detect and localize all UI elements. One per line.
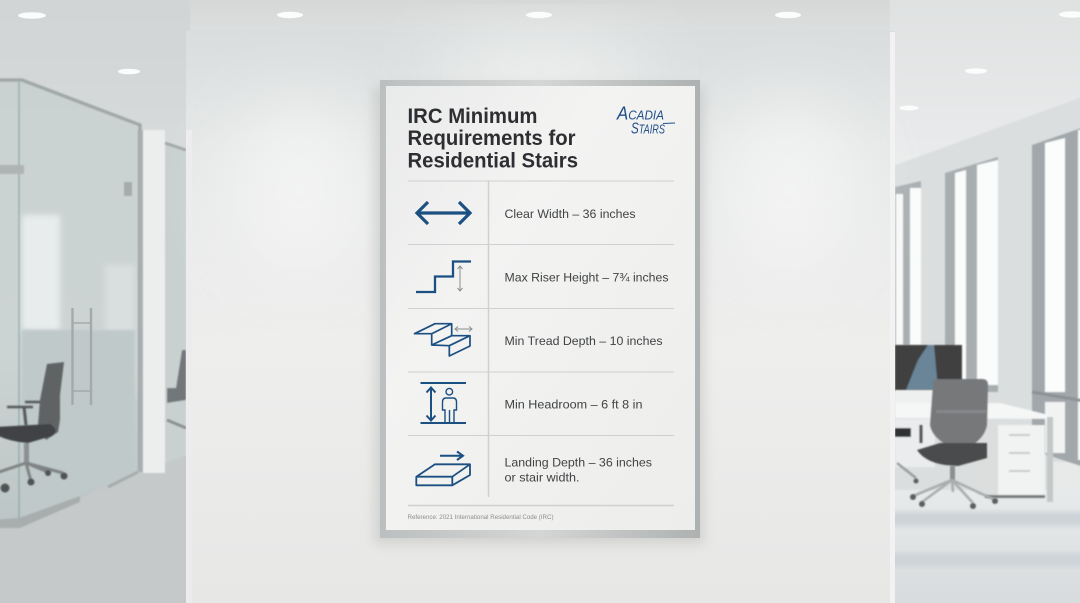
text: clear width: Clear Width – 36 inches [504, 207, 636, 221]
logo: Acadia Stairs: ACADIA [616, 104, 664, 124]
background: monitor [895, 345, 962, 391]
logo: Acadia Stairs: STAIRS [631, 120, 665, 137]
background: right office ceiling and wall [890, 0, 1080, 495]
text: landing depth: or stair width. [504, 470, 580, 484]
heading: IRC Minimum [408, 104, 538, 128]
icon: landing depth [416, 452, 470, 485]
background: left office with glass room [0, 0, 190, 603]
poster shadow [374, 86, 704, 544]
heading [408, 104, 578, 172]
poster panel [386, 86, 695, 530]
logo: Acadia Stairs [616, 104, 675, 137]
ceiling band [0, 0, 1080, 34]
icon: riser height [416, 262, 471, 292]
text: tread depth: Min Tread Depth – 10 inches [504, 334, 662, 348]
background: column and far room [138, 130, 186, 473]
icon: clear width arrow [417, 202, 470, 224]
background: windows [895, 125, 1080, 469]
background: door handle [72, 308, 91, 405]
text: headroom: Min Headroom – 6 ft 8 in [504, 398, 643, 412]
background: right floor [880, 490, 1080, 603]
text: riser height: Max Riser Height – 7¾ inches [504, 270, 668, 284]
background: glass room chair [0, 362, 68, 492]
feature wall [186, 31, 895, 603]
text: landing depth: Landing Depth – 36 inches [504, 456, 652, 470]
glass partition [0, 80, 140, 527]
heading: Residential Stairs [408, 148, 578, 172]
heading: Requirements for [408, 126, 576, 150]
text: landing depth [504, 456, 652, 484]
poster frame [380, 80, 700, 538]
reference note: Reference: 2021 International Residential Code (IRC) [408, 514, 554, 521]
background: office chair [910, 379, 998, 509]
ceiling lights [18, 11, 1080, 110]
icon: tread depth [414, 324, 472, 356]
row dividers [408, 181, 674, 506]
background: desk and drawers [895, 390, 1053, 502]
icon: headroom [420, 383, 466, 423]
